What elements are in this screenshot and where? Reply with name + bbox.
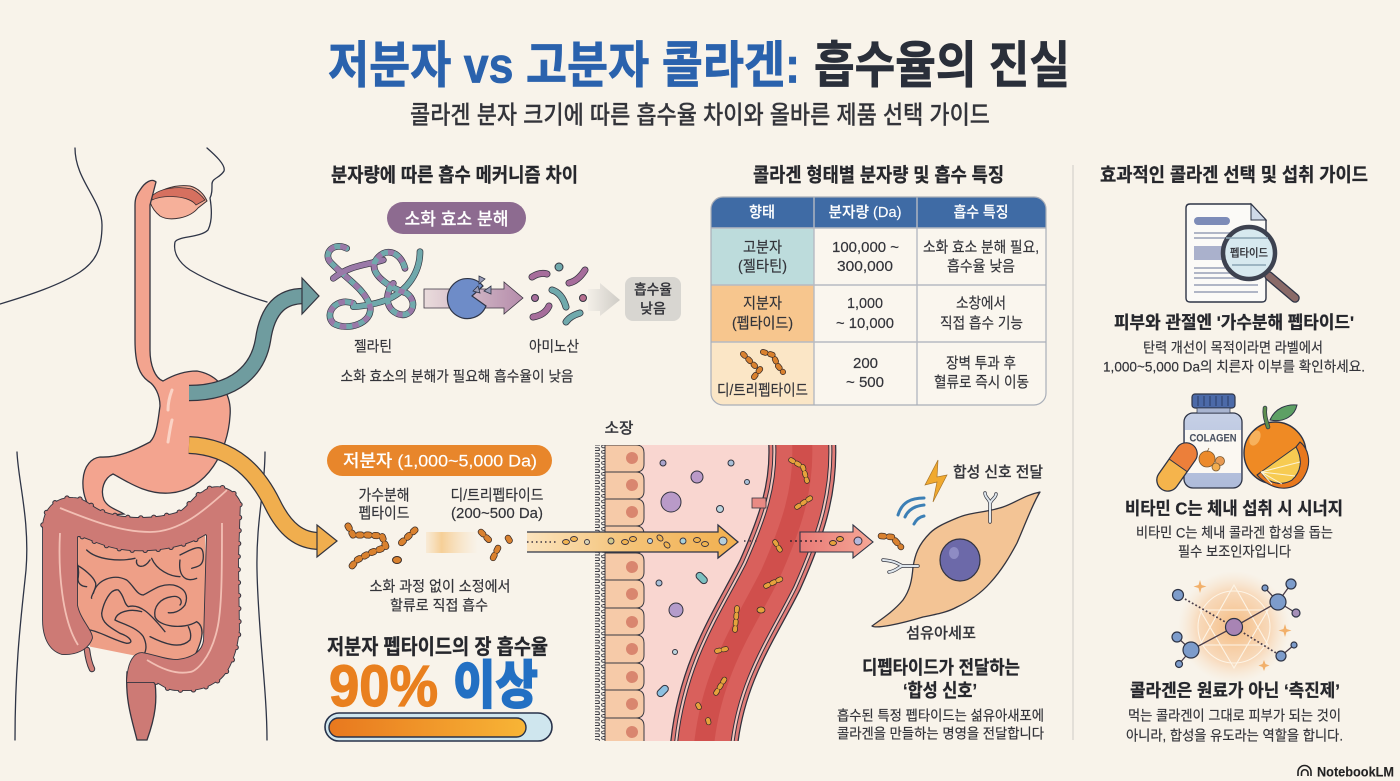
table header: 향태	[749, 204, 775, 221]
peptides in bloodstream	[698, 460, 812, 724]
icon: receptors	[883, 493, 996, 572]
row: di/tri peptide: ~ 500	[846, 374, 884, 391]
caption: 할류로 직접 흡수	[390, 598, 488, 614]
esophagus, stomach and duodenum	[83, 180, 230, 516]
bottle fruit graphic	[1199, 448, 1224, 471]
table header: 분자량 (Da)	[828, 204, 902, 221]
label: di/tri peptide: 디/트리펩타이드	[450, 487, 544, 504]
arrow: teal to high molecular pathway	[189, 278, 319, 393]
label: hydrolyzed peptide: 가수분해	[358, 487, 410, 504]
label: signal: 합성 신호 전달	[953, 464, 1043, 481]
box: low absorption	[625, 277, 681, 321]
title: 저분자 vs 고분자 콜라겐:	[328, 38, 800, 94]
box: low absorption: 흡수율	[634, 282, 672, 298]
label: hydrolyzed peptide	[358, 487, 410, 522]
row: low molecular: (펩타이드)	[732, 315, 793, 332]
label: fibroblast: 섬유아세포	[906, 625, 976, 642]
item 3 text	[1126, 708, 1343, 744]
text: synthesis signal description	[837, 708, 1044, 742]
icon: catalyst molecule	[1172, 571, 1300, 683]
item 3 text: 아니라, 합성을 유도라는 역할을 합니다.	[1126, 728, 1343, 744]
item 1 text: 탄력 개선이 목적이라면 라벨에서	[1143, 340, 1323, 356]
row: low molecular	[732, 295, 1023, 332]
breakdown blur	[426, 532, 478, 553]
icon: document with magnifier: 펩타이드	[1230, 246, 1268, 260]
label: amino acids: 아미노산	[529, 338, 579, 356]
capsule	[1153, 439, 1201, 495]
icon: dipeptide	[881, 536, 901, 547]
heading: absorption rate: 저분자 펩타이드의 장 흡수율	[327, 636, 548, 659]
row: di/tri peptide: 혈류로 즉시 이동	[934, 374, 1029, 391]
heading: synthesis signal	[862, 657, 1020, 701]
label: gelatin: 젤라틴	[354, 338, 392, 356]
row: low molecular: 직접 흡수 기능	[940, 315, 1023, 332]
caption: 소화 과정 없이 소정에서	[370, 578, 510, 596]
panel: guide	[1100, 164, 1368, 744]
table header	[749, 204, 1008, 221]
row: high molecular: (젤타틴)	[738, 258, 787, 275]
row: high molecular	[738, 239, 1039, 275]
icon: lightning	[925, 460, 947, 502]
body outline	[0, 148, 267, 740]
item 2 text: 비타민 C는 체내 콜라겐 합성을 돕는	[1136, 524, 1333, 540]
row: low molecular: ~ 10,000	[836, 315, 894, 332]
caption	[370, 578, 510, 614]
stomach highlights	[168, 390, 172, 442]
cell nuclei	[626, 452, 638, 738]
panel: fibroblast signal	[837, 460, 1044, 742]
icon: signal waves	[898, 498, 924, 524]
icon: di/tri peptides	[481, 532, 511, 558]
row: di/tri peptide: 디/트리펩타이드	[717, 382, 808, 399]
row: di/tri peptide	[717, 352, 1029, 399]
bottle	[1184, 413, 1242, 488]
item 1 text: 1,000~5,000 Da의 치른자 이부를 확인하세요.	[1103, 358, 1365, 374]
arrow: enzyme breakdown	[424, 282, 523, 314]
row: high molecular: 고분자	[743, 239, 782, 256]
item 3 text: 먹는 콜라겐이 그대로 피부가 되는 것이	[1128, 708, 1341, 724]
orange	[1244, 405, 1306, 484]
bottle label	[1185, 430, 1241, 473]
row: di/tri peptide: 200	[853, 355, 878, 372]
item 1 heading: 피부와 관절엔 '가수분해 펩타이드'	[1114, 312, 1354, 332]
panel: low molecular pathway	[325, 445, 552, 741]
title: 흡수율의 진실	[814, 38, 1070, 94]
logo: NotebookLM: NotebookLM	[1317, 764, 1394, 780]
panel: small intestine cross section	[527, 420, 873, 745]
item 3 heading: 콜라겐은 원료가 아닌 ‘측진제’	[1130, 680, 1340, 700]
subtitle: 콜라겐 분자 크기에 따른 흡수율 차이와 올바른 제품 선택 가이드	[410, 102, 990, 130]
tissue particles	[656, 460, 750, 698]
row: low molecular: 소창에서	[956, 295, 1006, 312]
box: low absorption: 낮음	[640, 300, 666, 316]
panel: molecular weight table	[711, 164, 1046, 405]
stat: 90 percent or more: 이상	[453, 658, 538, 716]
row: high molecular: 흡수율 낮음	[947, 258, 1015, 275]
low molecular pill: 저분자 (1,000~5,000 Da)	[343, 452, 537, 470]
heading: synthesis signal: ‘합성 신호’	[903, 680, 977, 701]
heading: 분자량에 따른 흡수 메커니즘 차이	[331, 164, 578, 186]
row: low molecular: 지분자	[743, 295, 782, 312]
icon: amino acids	[532, 263, 586, 322]
heading: synthesis signal: 디펩타이드가 전달하는	[862, 657, 1020, 678]
item 1 text	[1103, 340, 1365, 374]
small intestine	[73, 533, 207, 662]
arrow: orange to low molecular pathway	[189, 445, 337, 557]
connector stub	[752, 498, 766, 508]
stat: 90 percent or more: 90%	[329, 654, 438, 719]
icon: gelatin strands	[328, 246, 420, 327]
label: hydrolyzed peptide: 펩타이드	[358, 505, 410, 522]
epithelial cells	[605, 445, 644, 745]
text: synthesis signal description: 콜라겐을 만들하는 명영을 전달합니다	[837, 726, 1044, 742]
icon: enzyme	[447, 276, 491, 319]
stat: 90 percent or more	[329, 654, 538, 719]
tissue	[595, 440, 812, 745]
enzyme pill: 소화 효소 분해	[404, 209, 508, 229]
arrow: to low absorption	[588, 283, 620, 316]
item 2 heading: 비타민 C는 체내 섭취 시 시너지	[1125, 498, 1343, 518]
table header: 흡수 특징	[954, 204, 1008, 221]
item 2 text: 필수 보조인자입니다	[1178, 544, 1291, 560]
blood vessel	[704, 440, 802, 745]
arrow: from bloodstream to fibroblast	[790, 525, 873, 558]
heading: 콜라겐 형태별 분자량 및 흡수 특징	[753, 164, 1004, 186]
large intestine	[43, 487, 240, 740]
heading: 효과적인 콜라겐 선택 및 섭취 가이드	[1100, 164, 1368, 186]
enzyme pill	[387, 202, 526, 234]
icon: document with magnifier	[1186, 204, 1295, 302]
microvilli	[595, 445, 604, 741]
icon: collagen bottle with orange	[1153, 394, 1309, 495]
row: di/tri peptide: 장벽 투과 후	[946, 355, 1016, 372]
row: high molecular: 100,000 ~	[832, 239, 899, 256]
icon: hydrolyzed peptide chains	[348, 526, 415, 566]
icon: fibroblast cell	[872, 492, 1040, 627]
low molecular pill	[327, 445, 552, 476]
panel: absorption mechanism, high molecular	[328, 164, 681, 386]
item 2 text	[1136, 524, 1333, 560]
table cells	[711, 197, 1046, 405]
divider	[1072, 165, 1074, 740]
row: low molecular: 1,000	[847, 295, 883, 312]
row: high molecular: 300,000	[837, 258, 893, 275]
text: synthesis signal description: 흡수된 특정 펩타이드는 섦유아새포에	[837, 708, 1044, 724]
orange slice	[1257, 442, 1309, 488]
panel: digestive system body illustration	[0, 148, 337, 740]
caption: 소화 효소의 분해가 필요해 흡수율이 낮음	[340, 368, 574, 386]
progress bar	[325, 713, 552, 741]
bottle text: COLAGEN	[1190, 432, 1237, 444]
label: di/tri peptide: (200~500 Da)	[451, 505, 543, 522]
row: high molecular: 소화 효소 분해 필요,	[923, 239, 1039, 256]
label: di/tri peptide	[450, 487, 544, 522]
mouth and tongue	[150, 186, 207, 219]
label: small intestine: 소장	[604, 420, 634, 437]
bottle cap	[1192, 394, 1235, 413]
icon: peptides	[743, 352, 783, 377]
arrow: absorption through intestine wall	[527, 525, 757, 558]
